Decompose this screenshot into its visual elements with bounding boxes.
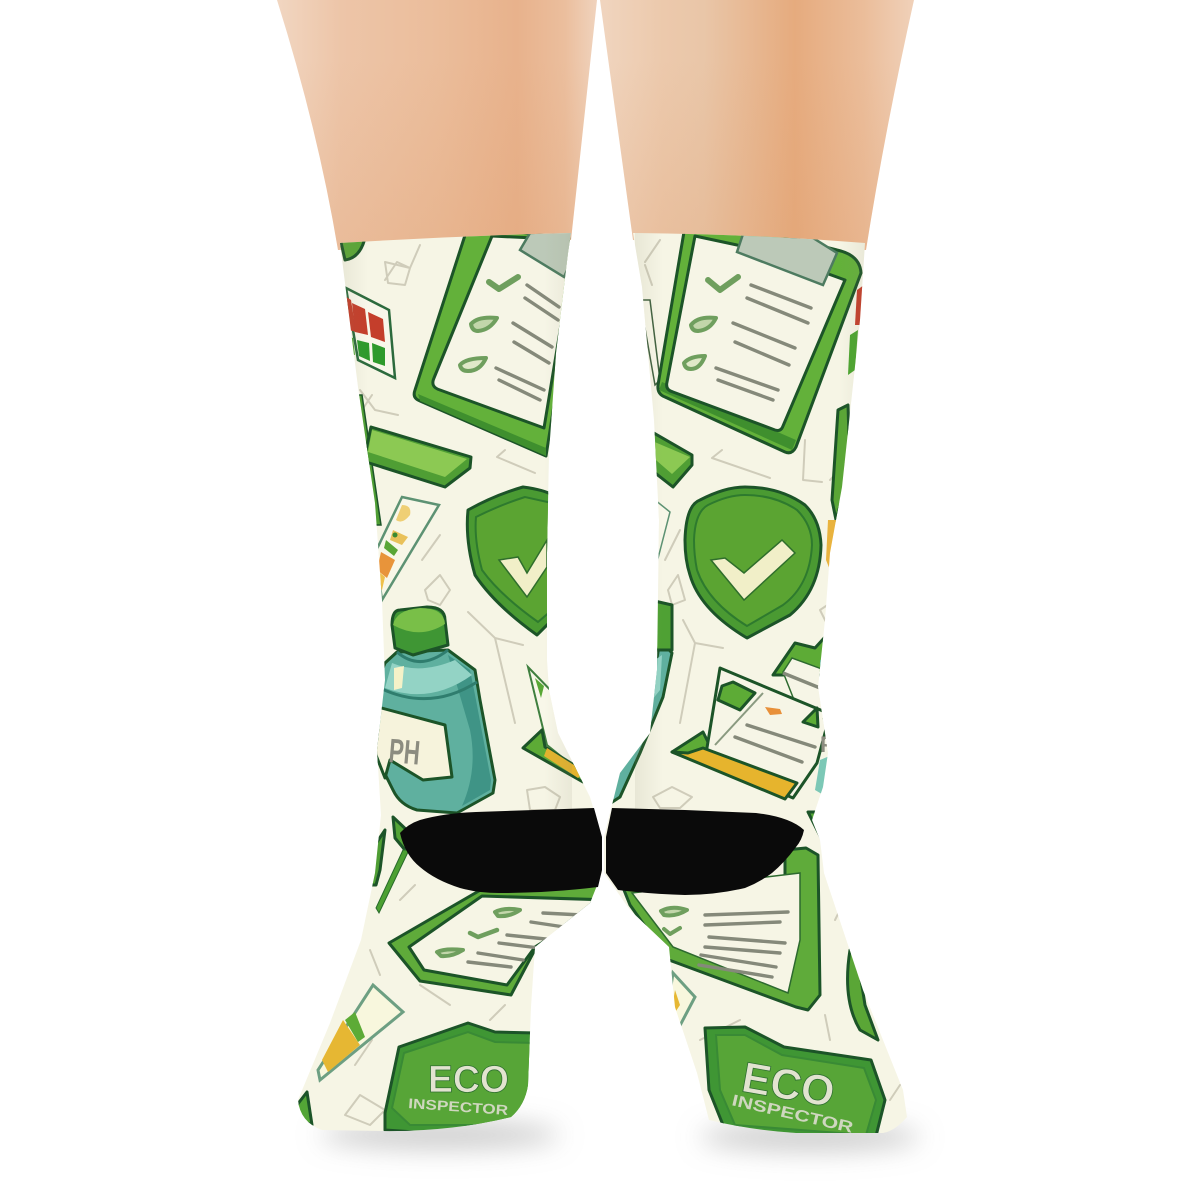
pH bottle left	[372, 607, 495, 813]
shield left	[467, 487, 552, 635]
clipboard upper left	[414, 226, 580, 456]
edge leaf left	[357, 395, 381, 525]
ECO badge left: ECO	[428, 1059, 509, 1101]
shading right sock	[635, 225, 867, 825]
ECO badge left	[385, 1023, 535, 1140]
green arc foot right	[848, 950, 878, 1040]
test strip foot right	[672, 970, 697, 1026]
faint sketch marks left	[345, 245, 560, 1125]
shield right	[685, 487, 821, 638]
check and leaf marks right	[684, 277, 738, 369]
ECO badge right	[705, 1027, 885, 1140]
green bar left	[366, 427, 471, 487]
right sock	[600, 225, 920, 1140]
green bar right	[654, 432, 694, 489]
left leg	[277, 0, 597, 250]
ECO badge left: INSPECTOR	[408, 1095, 509, 1118]
check and leaf marks	[460, 277, 518, 371]
test strip left	[375, 497, 439, 600]
floor shadow under socks	[320, 1121, 920, 1151]
flag marker right	[806, 810, 820, 838]
test strip right	[658, 502, 671, 560]
left sock	[290, 225, 620, 1140]
bottle partial right	[612, 600, 674, 804]
edge leaf and color card right	[832, 405, 850, 520]
flag marker left	[372, 816, 408, 914]
ECO badge right: ECO	[738, 1054, 838, 1117]
small foot leaf left	[297, 1092, 312, 1125]
bottle cap	[392, 607, 448, 655]
ECO badge right: INSPECTOR	[730, 1092, 855, 1137]
bottle fragment with label right edge	[815, 660, 828, 794]
bottle fragment with label right edge: P	[820, 732, 835, 757]
right leg	[600, 0, 914, 250]
document right	[672, 637, 830, 799]
small document left	[523, 667, 590, 782]
heel left	[400, 808, 602, 893]
clipboard upper right	[658, 226, 861, 453]
faint sketch marks right	[645, 240, 900, 1110]
heel right	[606, 808, 804, 895]
lower clipboard right	[620, 848, 820, 1010]
test strip foot left	[318, 985, 403, 1080]
shading left sock	[340, 225, 572, 825]
PH text: PH	[387, 732, 421, 773]
lower clipboard left	[387, 887, 596, 996]
color grid card	[345, 288, 395, 378]
